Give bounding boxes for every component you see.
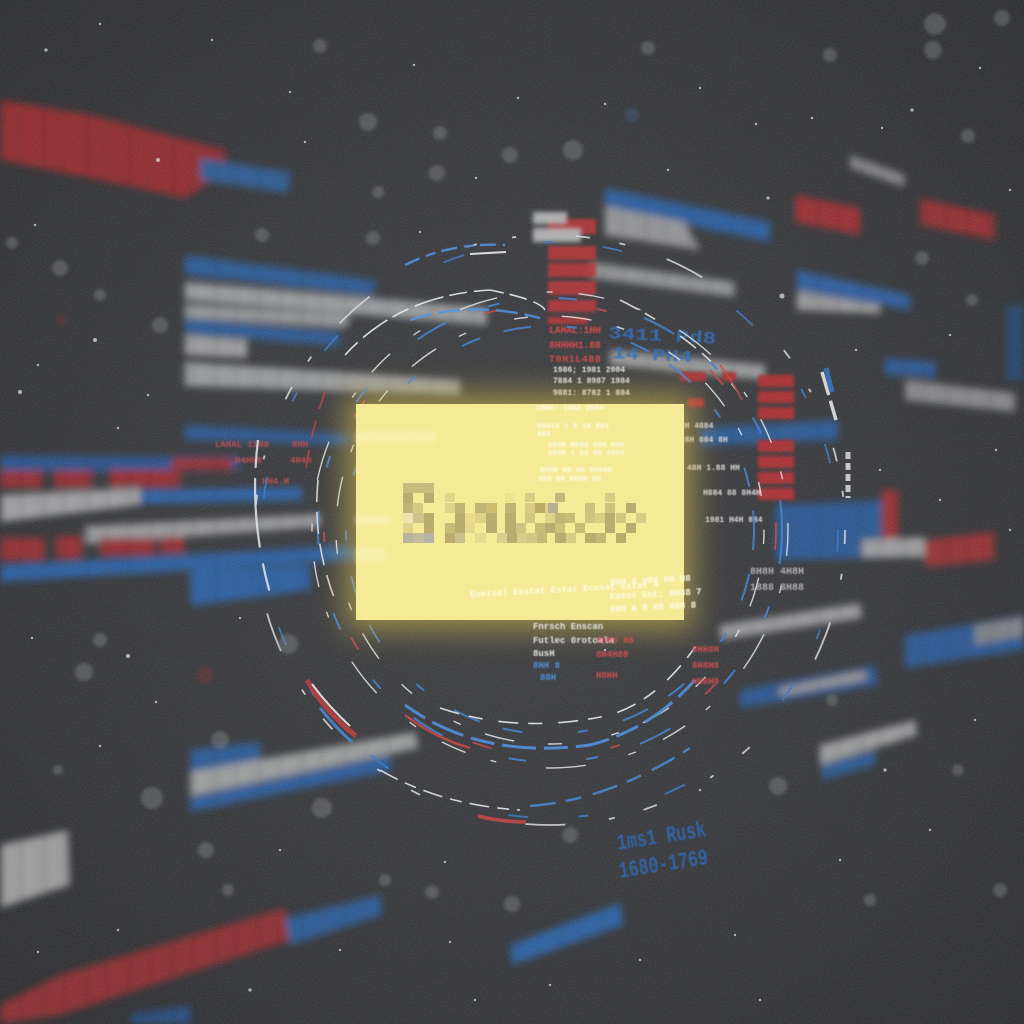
left red tiny labels: HH4.H [262, 477, 289, 487]
lower arc red and white [307, 680, 356, 736]
grey low line [780, 670, 866, 696]
left long blue bar [0, 545, 355, 582]
red tiny text column: 8HHHH1.88 [549, 341, 601, 352]
red small text: HH8H8 [692, 677, 719, 687]
red small text: 8H4H88 [596, 650, 628, 660]
blue small text [533, 661, 560, 683]
white text on note upper [536, 405, 625, 484]
right data panels [590, 155, 1024, 780]
white block at edge [0, 830, 70, 908]
white text on note upper: 88418 1 8 18 884 [537, 423, 610, 431]
red column top [548, 219, 596, 324]
blue tiny text over the rings [608, 325, 717, 368]
white text on note upper: 8H8H 8888 H8H H8H [548, 442, 625, 450]
red bottom bar [0, 908, 290, 1024]
bottom arc blue [530, 748, 690, 806]
lower arc blue [320, 708, 352, 742]
right white tiny lines: 1888 8H88 [750, 583, 804, 594]
left red arc [305, 392, 325, 480]
white text on note upper: 8H8H H8 H8 H8H8H [540, 467, 612, 475]
red tiny text column: T0H1L488 [549, 355, 601, 366]
right white tiny lines [750, 567, 804, 594]
left row red dashes [0, 458, 232, 488]
left red tiny labels [215, 440, 312, 487]
bottom arc red [478, 816, 526, 822]
left data panels [0, 100, 487, 606]
top red block one [795, 195, 860, 235]
blurred stripes on note [356, 432, 436, 562]
white tiny text above note: 9881: 8782 1 884 [553, 389, 630, 398]
upper right arc red [720, 365, 742, 400]
grey long line [720, 603, 862, 640]
note surface [356, 404, 684, 620]
right tick white [846, 452, 850, 498]
grey at edge [975, 617, 1024, 645]
lower inner arcs red [405, 715, 470, 748]
left block blue line [185, 318, 340, 346]
left block text line three [185, 362, 460, 395]
white text on note upper: 8H8H 1 88 H8 8H8H [548, 450, 625, 458]
grey line middle [610, 350, 765, 380]
blue bottom bar [285, 895, 382, 945]
left inner white arc [317, 480, 335, 600]
white small text: Fnrsch Enscan [533, 622, 603, 632]
blue bar [797, 270, 910, 310]
top outer white [470, 252, 506, 254]
blue date text: 1680-1769 [617, 845, 710, 885]
inner ring blue [346, 326, 754, 734]
white small text [533, 622, 615, 659]
left block blue header [185, 255, 375, 296]
top arc blue [410, 309, 540, 320]
left row white [0, 488, 140, 522]
red header bar top left [0, 100, 225, 198]
white line [190, 732, 418, 796]
top grey block [605, 206, 700, 250]
right tiny white text: 48H 1.88 HH [687, 464, 740, 473]
blue tiny text over the rings: 14 PH4 [612, 345, 693, 368]
left blue block [190, 565, 310, 606]
red tiny text column [549, 326, 601, 366]
left red tiny labels: LAHAL 1100 [215, 440, 269, 450]
blue bar top left [200, 158, 290, 193]
blue small text: 8HH 8 [533, 661, 560, 671]
red vertical block [882, 490, 898, 545]
white tiny text above note: 7884 1 8987 1984 [553, 377, 630, 386]
mosaic row two [403, 493, 615, 503]
blue bottom edge bar [130, 1005, 190, 1024]
left row red two [0, 536, 184, 560]
blue block behind [700, 420, 838, 446]
blue bar low [740, 665, 878, 708]
blue small text: 88H [540, 673, 556, 683]
left red tiny labels: H4HH8 [235, 456, 262, 466]
bottom arc white [380, 770, 520, 810]
white text on note upper: 888 [537, 431, 551, 439]
mosaic row one [403, 483, 434, 493]
top blue bar [605, 188, 770, 242]
white text on note upper: H8H 8H 8H8H 8H [538, 476, 601, 484]
white small text: 8usH [533, 649, 555, 659]
blue tag [885, 358, 935, 378]
glow behind note [346, 394, 694, 630]
red small text: H8HH [596, 671, 618, 681]
red tag [925, 532, 995, 567]
white tiny text above note: 1986; 1981 2004 [553, 366, 625, 375]
left block short line [185, 335, 247, 358]
grey tag [862, 537, 925, 558]
white text on note upper: 1986: 1982 2804 [536, 405, 604, 413]
blue date text: 1ms1 Rusk [615, 817, 708, 857]
right white tiny lines: 8H8H 4H8H [750, 567, 804, 578]
lower inner arcs [405, 680, 695, 748]
right tick blue [826, 368, 832, 392]
white small text: Futlec 0rotoala [533, 636, 615, 646]
left row white two [85, 514, 320, 544]
left block text line two [185, 304, 350, 328]
blue date text [615, 817, 710, 885]
small labels under note [533, 622, 719, 687]
red small text [596, 636, 719, 687]
blue line above rows [185, 425, 350, 445]
left red tiny labels: 8HH [292, 440, 308, 450]
red small text: 8888 88 [596, 636, 634, 646]
inner ring white [336, 316, 764, 744]
blue label [190, 742, 262, 772]
outer ring white [255, 235, 845, 825]
white text on note lower: 8HH 8 H8H H8 H8 [610, 574, 691, 588]
yellow note [356, 404, 702, 620]
right tiny white text: 8HH 4884 [675, 422, 714, 431]
left block text line one [185, 282, 487, 325]
mosaic row six [403, 533, 626, 543]
white tiny text above note [553, 366, 630, 398]
rings [255, 235, 848, 825]
top red block two [920, 198, 995, 240]
grey bar [797, 291, 880, 314]
outer ring blue [262, 242, 838, 818]
blue bottom tag [822, 750, 875, 780]
middle ring red [324, 304, 776, 756]
white text on note lower [470, 574, 702, 615]
blue edge block [1005, 305, 1024, 380]
red small text: 8HH8H [692, 645, 719, 655]
grey bottom tag [820, 720, 917, 765]
mosaic row four [403, 513, 646, 523]
grey line centre [590, 262, 735, 297]
white text on note lower: Eaest Ent; 8H88 7 [610, 587, 702, 602]
grey block over red column [533, 212, 581, 242]
right tick column [822, 372, 836, 420]
mosaic word [403, 483, 646, 543]
bottom left panels [0, 732, 623, 1024]
left white arc [255, 440, 272, 600]
middle ring blue [318, 298, 782, 762]
blue block middle [775, 500, 885, 560]
white text on note lower: Eueisal Esstat Estat Ecusat Estat 4 [470, 580, 660, 600]
left row blue two [140, 487, 302, 504]
left red tiny labels: 4H4H [290, 456, 312, 466]
blue bottom centre bar [510, 903, 623, 965]
grey line right [905, 380, 1015, 412]
middle ring white [312, 292, 788, 768]
lower inner arcs white [440, 640, 700, 724]
lower arc white [312, 684, 350, 726]
blue line [190, 755, 392, 812]
right tiny white text: 4H8H 884 8H [675, 436, 728, 445]
top left arcs [345, 290, 545, 355]
red tiny text column: LAHAL:1HH [549, 326, 601, 337]
top grey line [850, 155, 905, 187]
right tiny white text: H884 88 8H4H [703, 489, 761, 498]
left row blue [0, 455, 240, 472]
white text on note lower: H8H & 8 H8 H88 8 [610, 600, 696, 615]
mosaic row three [403, 503, 636, 513]
mosaic row five [403, 523, 636, 533]
blue large bar [905, 615, 1024, 668]
right tiny white text: 1981 H4H 884 [705, 516, 763, 525]
upper right arc [620, 300, 738, 392]
right tiny white text [675, 422, 763, 525]
red small text: 8H8H8 [692, 661, 719, 671]
top outer dashes [405, 245, 505, 265]
blue tiny text over the rings: 3411 Pd8 [608, 325, 717, 350]
red column right [680, 372, 794, 500]
